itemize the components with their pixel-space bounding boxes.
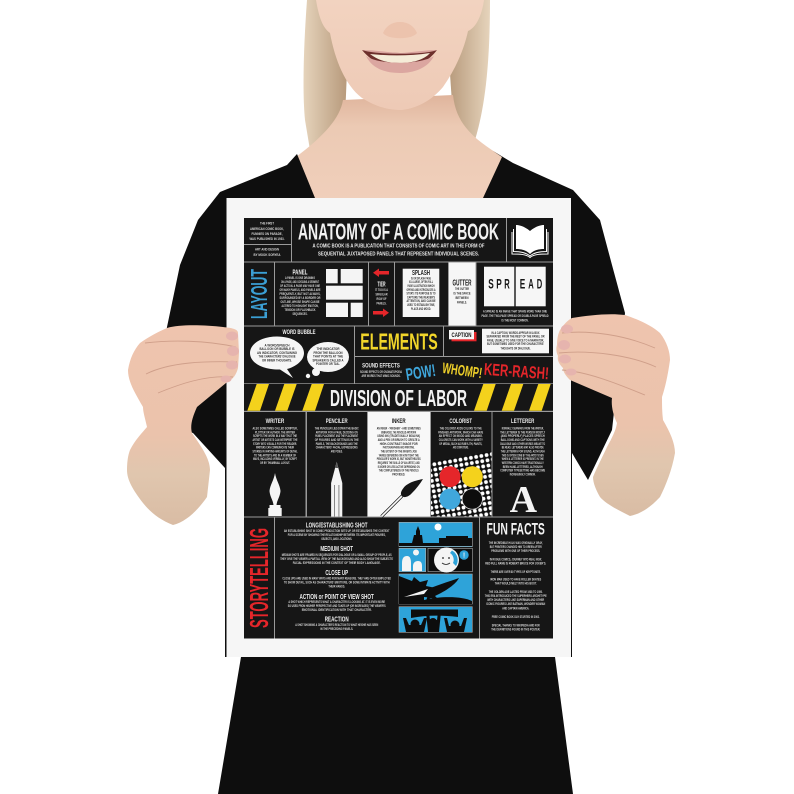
panel: word bubble: POINTER OR TAIL. [316, 362, 340, 366]
panel: letterer: BEEN HAND-LETTERED, ALTHOUGH [503, 465, 543, 469]
illustration: close up: ! [463, 552, 465, 560]
shot: long: OBJECTS, AND LOCATIONS. [321, 537, 352, 541]
panel: penciler: THE PENCILER LIES DOWN THE BASIC [315, 426, 359, 430]
panel: penciler: PANEL PLACEMENT AND THE PLACEMENT [315, 434, 358, 438]
panel: fun facts: WITH CHARACTERS LIKE SUPERMAN AND OTHER [487, 598, 545, 602]
model: black shirt and skirt [150, 151, 625, 794]
panel: sound effects: SOUND EFFECTS [362, 362, 400, 370]
shot: reaction: IN THE PRECEDING PANELS. [320, 627, 353, 631]
panel: word bubble: AN INDICATOR, CONTAINING [257, 351, 297, 355]
panel: penciler: PENCILER [326, 418, 348, 425]
panel: inker: INKER [392, 418, 406, 425]
panel: letterer [492, 412, 553, 521]
panel: gutter [449, 262, 476, 326]
halftone dots [431, 451, 492, 516]
shot: medium: MEDIUM SHOTS ARE FRAMED IN SEQUENCES FOR DIALOGUE OR A SMALL GROUP OF PEOPLE, AS [282, 553, 392, 557]
panel: splash: SPLASH [412, 270, 430, 277]
panel: splash: PAGE ILLUSTRATION WHICH [408, 284, 435, 288]
panel: panel definition: OR MANY PANELS, AND PANELS ARE [280, 288, 321, 292]
icon: ink brush [382, 479, 423, 516]
heading: ANATOMY OF A COMIC BOOK [298, 218, 499, 244]
panel: tier: IT TOO IS A [375, 288, 388, 292]
panel: layout label: LAYOUT [246, 269, 272, 319]
arrow: right [373, 308, 389, 317]
panel: fun facts: RED FULL NAME IS ROBERT BRUCE FOR JOKER'S. [485, 562, 546, 566]
panel: writer: WAYS, INCLUDING VERBALLY, BY SCRIPT [253, 457, 297, 461]
panel: spread: E [520, 276, 525, 292]
icon: pencil [331, 462, 342, 516]
panel: splash: IS A LARGE, OFTEN FULL [409, 280, 433, 284]
panel: panel definition: PANEL [292, 270, 308, 276]
panel: caption: IN A CAPTION, WORDS APPEAR IN A BOX [492, 331, 540, 335]
shot: long: LONG/ESTABLISHING SHOT [306, 520, 368, 530]
illustration: medium shot [399, 548, 426, 572]
poster content [244, 218, 553, 638]
arrow: left [373, 268, 389, 277]
thought bubble [306, 342, 349, 378]
panel: tier [369, 262, 394, 326]
panel: panel definition [275, 262, 368, 326]
shot: close up: TO SHOW DETAIL, SUCH AS CHARACTERS' EMOTIONS, OR SOME INTIMATE ACTIVITY WITH [284, 580, 390, 584]
panel: spread: R [504, 276, 510, 292]
panel: letterer: WESTERN COMICS HAVE TRADITIONALLY [502, 461, 544, 465]
shot: reaction [295, 615, 379, 631]
panel: tier: TIER [378, 282, 386, 288]
panel: panel definition: FREQUENTLY, BUT NOT ALWAYS, [280, 292, 321, 296]
panel: letterer: WHEN A LETTERER IS PRESENT. IN THE [502, 457, 544, 461]
shot: medium: FACIAL EXPRESSIONS IN THE CONTEXT OF THEIR BODY LANGUAGE. [293, 561, 381, 565]
panel: panel definition: ALTERED TO HIGHLIGHT EMOTION, [282, 304, 319, 308]
panel: header note: BY MOOK SORYEA [254, 252, 281, 257]
shot: close up: THEIR HANDS. [328, 584, 345, 588]
panel: splash: USED TO ESTABLISH TIME, [407, 303, 435, 307]
panel: sound effects: ARE WORDS THAT MIMIC SOUNDS. [362, 374, 401, 378]
panel: title: A COMIC BOOK IS A PUBLICATION THAT CONSISTS OF COMIC ART IN THE FORM OF [312, 244, 485, 250]
panel: sound effects [355, 357, 553, 384]
model: hair [304, 0, 490, 150]
panel: splash: IS OR SPLASH PAGE [411, 276, 431, 280]
panel: word bubble: WORD BUBBLE [282, 330, 316, 336]
panel: gutter: BETWEEN [456, 296, 469, 300]
panel: word bubble: FROM THE BALLOON [314, 351, 343, 355]
panel: letterer: COMPUTER TYPESETTING HAS BECOME [500, 469, 546, 473]
speech bubble [250, 336, 304, 378]
shot: medium: THEY GIVE THE VIEWER A PARTIAL VIEW OF THE BACKGROUND AND ALSO SHOW THE SUBJECTS' [280, 557, 393, 561]
panel: penciler [307, 412, 367, 516]
panel: inker: THE COMPLETENESS OF THE PENCILS [379, 469, 419, 473]
sound word: pow: POW! [404, 361, 437, 384]
panel: colorist: OF MEDIA, SUCH AS RUBYLITH, PAINTS, [439, 442, 482, 446]
panel: caption: PAGE, USUALLY TO GIVE VOICE TO A NARRATOR, [487, 338, 544, 342]
panel: word bubble: THE CHARACTERS' DIALOGUE [258, 354, 296, 358]
icon: pen nib [268, 473, 282, 516]
panel: fun facts: THAT WOULD MELT INTO HIS BOOT. [495, 582, 537, 586]
panel: inker: VARIES DEPENDING ON HOW TIGHT THE [379, 453, 419, 457]
shot: action: SO USED FROM HIS/HER PERSPECTIVE AND TAKES UP (OR INCREASES) THE VIEWER'S [288, 604, 386, 608]
panel: inker: AN INKER - 'FINISHER' - AND SOMETIMES [377, 426, 421, 430]
panel: fun facts: BUT PRINTERS CHANGED HIM TO GREEN AFTER [490, 545, 542, 549]
shot: reaction: REACTION [325, 615, 349, 624]
panel: inker: REQUIRES THE SKILLS OF AN ARTIST, AND [378, 461, 420, 465]
panel: caption: BUT SOMETIMES USED FOR THE CHARACTERS' [487, 342, 544, 346]
shot: close up [282, 568, 391, 588]
panel: fun facts: THE DEFINITIONS FOUND IN THIS POSTER. [491, 628, 540, 632]
banner: division of labor [244, 384, 553, 411]
sound word: ker-rash: KER-RASH! [483, 360, 549, 383]
panel: penciler: CHARACTERS' FACIAL EXPRESSIONS [316, 446, 358, 450]
panel: fun facts: IRON MAN USED TO HAVE ROLLER SKATES [490, 578, 542, 582]
panel: splash: CAPTURE THE READER'S [407, 295, 436, 299]
shot: medium [280, 544, 393, 565]
panel: title: SEQUENTIAL JUXTAPOSED PANELS THAT REPRESENT INDIVIDUAL SCENES. [318, 252, 479, 258]
panel: fun facts: FREE COMIC BOOK DAY STARTED IN 2002. [492, 615, 540, 619]
nails [558, 324, 576, 376]
hazard stripes [247, 384, 551, 411]
panel: colorist: COLORISTS CAN WORK WITH A VARIETY [439, 438, 483, 442]
panel: panel definition: SURROUNDED BY A BORDER OR [280, 296, 321, 300]
panel: panel definition: A PANEL IS ONE DRAWING [285, 276, 315, 280]
panel: inker: AND A PEN OR BRUSH TO CREATE A [378, 438, 420, 442]
panel: header note: THE FIRST [260, 220, 274, 226]
panel: inker [368, 412, 430, 516]
panel: inker: PROVIDED. [392, 472, 405, 476]
panel: fun facts: SPECIAL THANKS TO WIKIPEDIA AND FOR [492, 624, 540, 628]
panel: word bubble: A WORD/SPEECH [264, 344, 290, 348]
panel: letterer: (AND PROPERLY) PLACES SPEECH [501, 434, 545, 438]
panel: fun facts [480, 518, 553, 638]
panel: penciler: OF FIGURES AND SETTINGS IN THE [315, 438, 359, 442]
panel: splash: ATTENTION, AND CAN BE [406, 299, 436, 303]
panel: spread: A [528, 276, 534, 292]
panel: caption [444, 326, 553, 356]
panel: spread: S [488, 276, 494, 292]
panel: splash: PLACE AND MOOD. [411, 307, 431, 311]
panel: fun facts: THIS ERA INTRODUCED THE SUPERHERO ARCHETYPE [485, 594, 547, 598]
panel: title [292, 218, 506, 262]
panel: writer: TO THE ARTISTS AND IN A NUMBER OF [254, 453, 296, 457]
panel: fun facts: THERE ARE OVER 80 TYPES OF KRYPTONITE. [491, 570, 541, 574]
shot: long: AN ESTABLISHING SHOT IN COMIC PRODUCTION SETS UP, OR ESTABLISHES THE CONTEXT [284, 529, 390, 533]
panel: writer [244, 412, 306, 516]
panel: elements heading: ELEMENTS [360, 328, 438, 354]
panel: gutter: GUTTER [452, 278, 472, 288]
color circles [440, 466, 483, 510]
panel: inker: THE EXTENT OF THE INKER'S JOB [381, 450, 417, 454]
left hand and forearm [127, 325, 239, 525]
panel: letterer: DIALOGUE AND OTHER WORDS MEANT TO [500, 442, 545, 446]
shot: long: FOR A SCENE BY SHOWING THE RELATIONSHIP BETWEEN ITS IMPORTANT FIGURES, [288, 533, 386, 537]
panel: colorist: AND COMPUTERS. [453, 446, 469, 450]
model: face [316, 0, 484, 110]
panel: tier: SINGULAR [376, 292, 388, 296]
panel: colorist: COLORIST [449, 418, 472, 425]
panel: fun facts: FUN FACTS [487, 520, 545, 538]
panel: gutter: IS THE SPACE [454, 292, 471, 296]
panel: letterer: THE LETTERER IS THE PERSON MOSTLY [500, 430, 546, 434]
panel: writer: ARTIST OR ARTISTS CAN INTERPRET THE [252, 438, 298, 442]
panel: sound effects: SOUND EFFECTS OR ONOMATOPOEIA [360, 370, 402, 374]
panel: word bubble: THAT POINTS AT THE [313, 354, 344, 358]
panel: tier: ROW OF [376, 297, 386, 301]
panel: colorist [431, 412, 492, 516]
panel: caption: CAPTION [452, 333, 472, 339]
panel: inker: EMBRACED, THE PENCILED ARTWORK [381, 430, 417, 434]
panel: letterer: LETTERER [511, 418, 535, 425]
panel: panel definition: OUTLINE, WHOSE SHAPE CAN BE [280, 300, 320, 304]
panel: inker: IS MORE OR LESS ACTIVE DEPENDING ON [378, 465, 420, 469]
panel: letterer: NORMALLY SEPARATE FROM THE WRITER, [502, 426, 544, 430]
panel: writer: ALSO SOMETIMES CALLED SCRIPTER, [252, 426, 298, 430]
panel: panel definition: ON A PAGE, AND CONTAINS A SEGMENT [281, 280, 319, 284]
panel: writer: WRITER [266, 418, 285, 425]
panel: comic illustrations [395, 518, 479, 638]
panel: fun facts: THE INCREDIBLE HULK WAS ORIGINALLY GRAY, [489, 541, 543, 545]
icon: blackletter A: A [510, 479, 538, 521]
panel: colorist: THE COLORIST ADDS COLORS TO THE [440, 426, 482, 430]
panel: panel definition: TENSION OR FLASHBACK [284, 308, 316, 312]
illustration: long shot [399, 522, 472, 547]
shot: long [284, 520, 390, 541]
panel: header note: AMERICAN COMIC BOOK, [250, 226, 284, 231]
shot: action: A SHOT WHICH REPRESENTS WHAT A CHARACTER IS LOOKING AT. IT IS EVEN MORE [288, 600, 386, 604]
panel: spread: A SPREAD IS AN IMAGE THAT SPANS MORE THAN ONE [483, 310, 548, 314]
panel: letterer: THIS IS OFTEN DONE BY THE ARTIST EVEN [502, 453, 544, 457]
shot: action: EMOTIONAL IDENTIFICATION WITH THAT CHARACTER. [302, 608, 372, 612]
panel: shot types [275, 518, 399, 638]
panel: spread [476, 262, 553, 326]
shot: action: ACTION or POINT OF VIEW SHOT [300, 592, 374, 601]
panel: inker: PENCILER'S WORK IS, BUT NONETHELESS [377, 457, 421, 461]
model: neck and chest [296, 95, 503, 200]
panel: splash: OPENS AND INTRODUCES A [406, 288, 436, 292]
panel: letterer: INCREASINGLY COMMON. [510, 472, 536, 476]
panel: writer: SCRIPTS THE WORK IN A WAY THAT THE [253, 434, 298, 438]
panel: penciler: ARTWORK FOR A PAGE, DECIDING ON [316, 430, 358, 434]
panel: letterer: BE READ. LETTERERS MAY ALSO PROVIDE [502, 446, 544, 450]
poster inner frame [244, 218, 553, 638]
panel: penciler: AND POSES. [331, 450, 343, 454]
panel: spread: D [537, 276, 542, 292]
panel: caption: THOUGHTS OR DIALOGUE. [500, 346, 531, 350]
shot: close up: CLOSE UPS ARE USED IN MANY WAYS AND FOR MANY REASONS. THEY ARE OFTEN EMPLOYED [282, 576, 391, 580]
panel: header note: FUNNIES ON PARADE, [252, 231, 282, 236]
panel: colorist: FINISHED ARTWORK, WHICH CAN HAVE [438, 430, 484, 434]
panel: colorist: AN EFFECT ON MOOD AND MEANING. [439, 434, 483, 438]
panel: header note: ART AND DESIGN [255, 246, 279, 252]
panel: caption: SEPARATED FROM THE REST OF THE PANEL OR [486, 335, 545, 339]
panel: header note [244, 218, 291, 262]
panel: spread: PAGE. THE TWO-PAGE SPREAD OR DOUBLE-PAGE SPREAD [482, 314, 549, 318]
panel: gutter: PANELS. [457, 300, 467, 304]
banner: division of labor: DIVISION OF LABOR [330, 385, 467, 411]
panel: spread: P [496, 276, 502, 292]
panel layout diagram [326, 269, 363, 317]
panel: word bubble: THE INDICATOR [316, 347, 340, 351]
shot: action [288, 592, 386, 612]
panel: inker: USING INK (TRADITIONALLY INDIA INK) [377, 434, 420, 438]
panel: spread: IS THE MOST COMMON. [502, 318, 529, 322]
panel: letterer: THE LETTERING FOR SOUND, ALTHOUGH [501, 450, 545, 454]
panel: splash: STORY. ITS PURPOSE IS TO [406, 292, 436, 296]
panel: letterer: BALLOONS AND CAPTIONS WITH THE [501, 438, 545, 442]
panel: gutter: THE GUTTER [455, 287, 469, 291]
nails [220, 332, 239, 382]
panel: word bubble: SPEAKER IS CALLED A [312, 358, 344, 362]
panel: word bubble [244, 326, 354, 383]
panel: fun facts: ICONIC FIGURES LIKE BATMAN, WONDER WOMAN [486, 602, 546, 606]
panel: storytelling label: STORYTELLING [244, 528, 274, 628]
shot: medium: MEDIUM SHOT [320, 544, 353, 553]
illustration: action shot [399, 574, 472, 604]
illustration: reaction shot [399, 607, 472, 632]
panel: fun facts: THE GOLDEN AGE LASTED FROM 1938 TO 1950. [489, 590, 543, 594]
icon: open book [507, 218, 553, 262]
panel: tier: PANELS. [376, 302, 387, 306]
panel: panel definition: OF ACTION. A PAGE MAY HAVE ONE [280, 284, 321, 288]
panel: header note: WAS PUBLISHED IN 1933. [250, 236, 284, 241]
panel: writer: OR BY THUMBNAIL LAYOUT. [260, 461, 290, 465]
shot: reaction: A SHOT SHOWING A CHARACTER'S REACTION TO WHAT HE/SHE HAS SEEN [295, 623, 379, 627]
panel: fun facts: AND CAPTAIN AMERICA. [502, 606, 529, 610]
shot: close up: CLOSE UP [325, 568, 348, 577]
panel: inker: HIGH-CONTRAST IMAGE FOR [380, 442, 418, 446]
panel: splash [395, 262, 448, 326]
panel: writer: PLOTTER OR AUTHOR. THE WRITER [255, 430, 295, 434]
panel: writer: WRITERS CAN COMMUNICATE THEIR [256, 446, 294, 450]
panel: fun facts: IN ROGUE COMICS, JOURNEY INTO REAL NOW, [490, 558, 542, 562]
panel: word bubble: OR INNER THOUGHTS. [262, 358, 292, 362]
panel: word bubble: BALLOON OR BUBBLE IS [260, 347, 295, 351]
panel: inker: PHOTOGRAPHING AND PRINTING. [383, 446, 415, 450]
panel: elements heading [355, 326, 443, 356]
sound word: whomp: WHOMP! [441, 360, 483, 382]
panel: storytelling label [244, 518, 274, 638]
poster sheet [226, 198, 571, 657]
panel: layout label [244, 262, 274, 326]
panel: writer: STORY INTO VISUALS FOR THE READER. [253, 442, 297, 446]
panel: penciler: PANELS, THE BACKGROUNDS AND THE [316, 442, 358, 446]
right hand and forearm [556, 314, 675, 516]
panel: fun facts: PROBLEMS WITH ONE OF THEIR PROCESS. [491, 549, 540, 553]
panel: writer: STORIES IN VARYING AMOUNTS OF DETAIL [252, 450, 298, 454]
panel: panel definition: SEQUENCES. [292, 312, 308, 316]
